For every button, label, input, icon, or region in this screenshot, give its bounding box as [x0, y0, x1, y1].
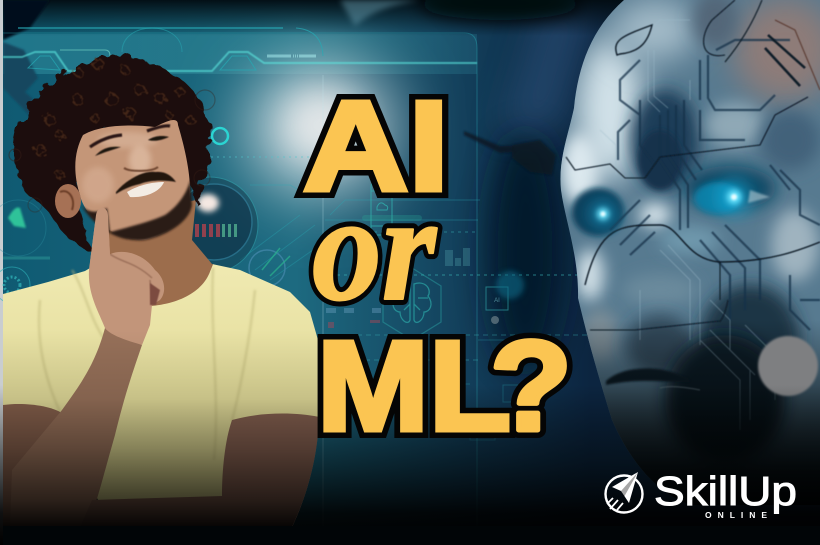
moustache and smile [116, 172, 176, 194]
raised finger over beard [90, 208, 110, 262]
hand with raised finger [89, 208, 164, 345]
dashboard widgets left [0, 177, 524, 328]
lips [606, 368, 690, 385]
headline: AI: AI [303, 75, 449, 218]
bottom vignette [0, 385, 820, 545]
eye glow: right [716, 179, 752, 215]
robot face [550, 0, 820, 510]
icon: rocket badge [606, 472, 642, 512]
circuit traces [610, 40, 820, 330]
headline: question mark: ? [490, 315, 572, 458]
headline: or: or [312, 164, 438, 332]
glowing bokeh circle [758, 336, 818, 396]
icon: phone [371, 183, 392, 235]
icon: AI chip [486, 287, 508, 310]
panel seams [566, 0, 820, 330]
wordmark: SkillUp [654, 468, 797, 514]
skin highlights [98, 132, 158, 148]
headline: AI: AI [303, 75, 449, 218]
eyebrows [90, 126, 170, 147]
headline: question mark: ? [490, 315, 572, 458]
robot arm cable [464, 131, 556, 175]
icon: AI chip: AI [494, 298, 500, 304]
beard [81, 180, 192, 240]
headline: or: or [312, 164, 438, 332]
eyes [95, 136, 169, 156]
tagline: ONLINE [705, 510, 767, 520]
arms [3, 328, 319, 527]
icon: cyan ring [212, 128, 228, 144]
dark fade over body [3, 351, 318, 526]
headline: ML: ML [317, 315, 511, 458]
machinery behind head [3, 0, 50, 40]
man thinking [3, 55, 319, 527]
eye glow: left [589, 200, 617, 228]
curly hair [9, 55, 215, 252]
torso and t-shirt [3, 262, 319, 505]
logo: SkillUp Online [606, 468, 797, 520]
face [55, 120, 192, 240]
HUD interface panel [3, 28, 590, 545]
headline: ML: ML [317, 315, 511, 458]
neck [104, 200, 212, 306]
icon: brain in hexagon [383, 268, 441, 340]
